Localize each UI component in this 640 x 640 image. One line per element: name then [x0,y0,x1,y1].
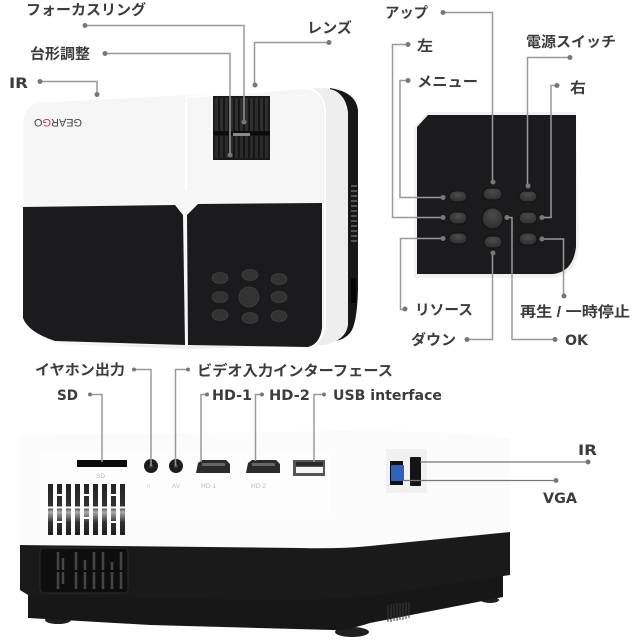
black vent grille [40,548,128,593]
panel buttons [449,188,537,248]
leader: menu [400,78,446,200]
leader: play pause [540,236,566,298]
leader: keystone [102,51,232,158]
panel black face [417,115,576,274]
leader: OK [504,215,558,342]
label: up: アップ [385,5,428,22]
IR window [410,457,421,486]
label: keystone: 台形調整 [30,45,91,63]
side port [351,278,356,303]
control buttons on top view [212,270,287,324]
label: earphone output: イヤホン出力 [35,362,125,379]
underside vent [388,602,409,622]
label: lens: レンズ [307,19,353,37]
black lower body [20,531,510,601]
SD caption: SD [96,473,105,480]
label: OK: OK [565,333,589,349]
label: IR side: IR [578,443,597,459]
leader: HD-2 [256,392,264,461]
lower right black panel [187,203,322,347]
AV caption: AV [172,483,181,490]
label: IR: IR [9,76,28,92]
label: menu: メニュー [417,75,478,91]
control panel close-up [414,112,579,278]
shell inner seam [186,88,325,348]
SD slot [77,460,127,467]
leader: USB [314,392,326,462]
AV jack [169,459,183,473]
label: USB interface: USB interface [333,388,442,404]
leader: SD [88,392,102,462]
label: power: 電源スイッチ [526,34,616,51]
lower left black panel [23,205,185,345]
panel soft border [414,112,579,278]
GEARGO logo upside down: GEARGO [34,116,82,128]
rubber feet [45,597,499,637]
white vent grille [48,484,125,535]
labels and leaders: control panel [385,5,630,349]
audio jack [144,459,158,473]
HD-1 caption: HD-1 [201,483,217,490]
leader: up [440,10,496,184]
leader: down [464,250,496,342]
side port recess [386,449,427,493]
projector top view [23,88,358,349]
leader: left [392,42,446,220]
black side of body [330,88,358,341]
label: play pause: 再生 / 一時停止 [520,303,630,321]
label: SD: SD [57,388,78,404]
base plinth [28,570,503,630]
leader: earphone [132,368,151,466]
projector rear view [20,431,510,637]
port panel recess [40,453,330,513]
lens window [213,96,270,160]
HD-2 caption: HD-2 [251,483,267,490]
white shell side band [23,88,348,349]
leader: HD-1 [201,392,209,462]
leader: focus ring [82,23,246,124]
label: focus ring: フォーカスリング [26,1,147,19]
audio caption: ∩ [146,483,151,490]
leader: IR [38,79,100,97]
labels and leaders: top view [9,1,353,158]
label: VGA: VGA [543,491,577,507]
leader: VGA [404,478,558,483]
HDMI port 2 [246,460,280,473]
label: HD-2: HD-2 [269,388,310,404]
leader: IR side [420,460,590,464]
label: source: リソース [415,303,473,319]
white upper body [20,431,510,548]
HDMI port 1 [196,460,230,473]
label: video input: ビデオ入力インターフェース [197,362,393,380]
leader: source [400,236,446,312]
label: down: ダウン [411,331,456,349]
labels and leaders: rear view [35,362,597,507]
side vents [351,186,357,241]
label: HD-1: HD-1 [212,388,252,404]
leader: video input [176,368,190,466]
USB port [293,460,325,476]
label: left: 左 [417,38,433,55]
VGA port [390,461,404,485]
leader: right [540,83,560,220]
white top face [23,89,323,347]
leader: lens [252,40,332,88]
leader: power [526,55,572,188]
label: right: 右 [570,80,586,97]
